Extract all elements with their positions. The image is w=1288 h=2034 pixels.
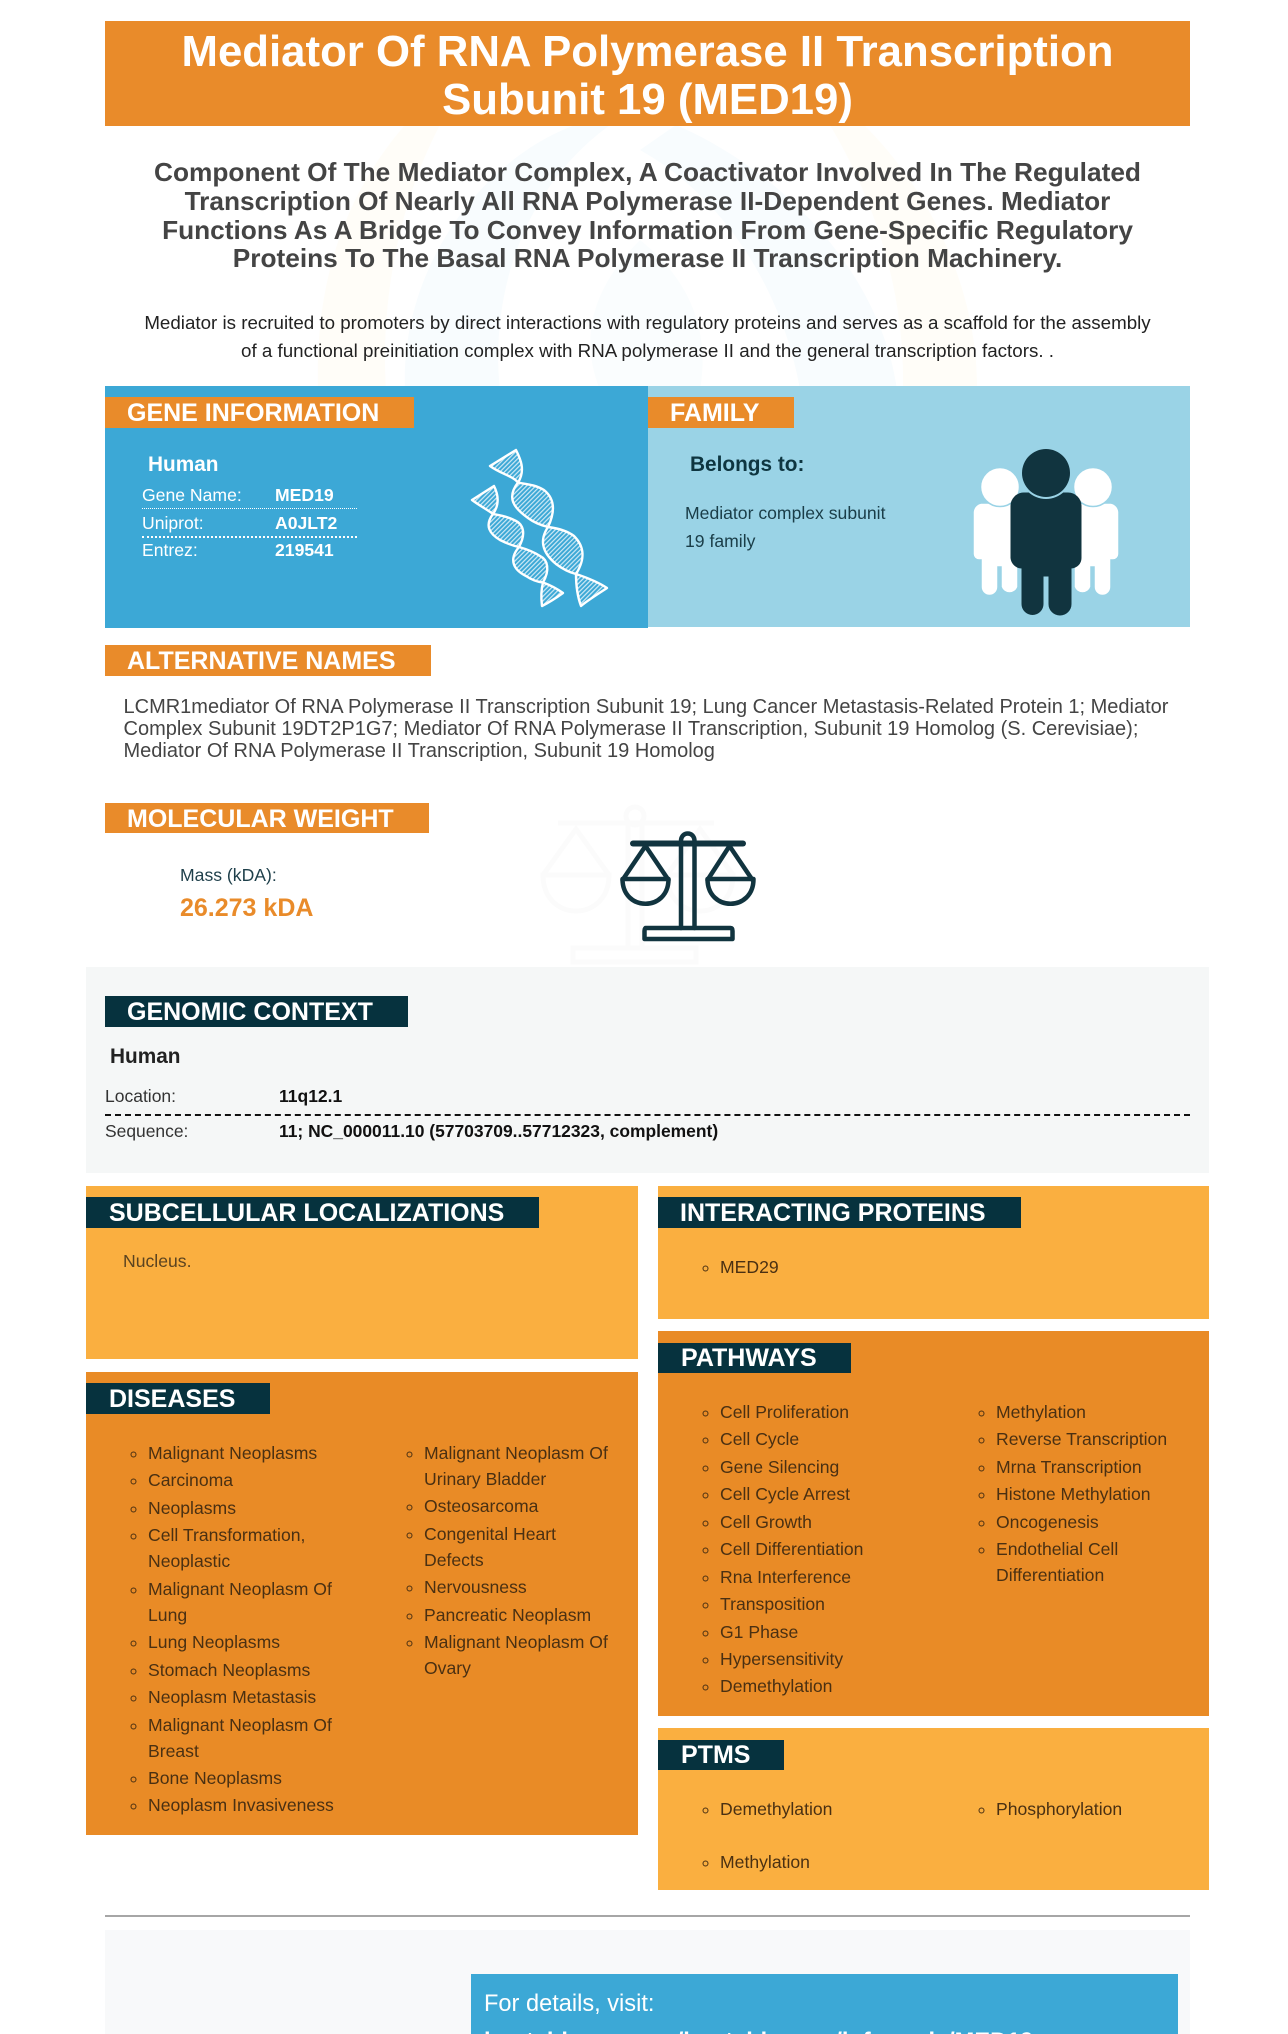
belongs to label: Belongs to:	[690, 453, 804, 476]
panel: footer	[105, 1930, 1190, 2034]
panel: interacting proteins	[658, 1186, 1209, 1319]
disease list column 1: Stomach Neoplasms	[148, 1660, 310, 1680]
pathway list column 1: Cell Proliferation	[720, 1402, 849, 1422]
details text: For details, visit:	[484, 1991, 654, 2017]
family name	[685, 503, 886, 551]
disease list column 1: Breast	[148, 1740, 199, 1760]
disease list column 1: Neoplasms	[148, 1498, 236, 1518]
footer divider	[105, 1915, 1190, 1917]
localization text: Nucleus.	[123, 1251, 191, 1271]
pathway list column 2: Histone Methylation	[996, 1484, 1151, 1504]
description: of a functional preinitiation complex with RNA polymerase II and the general transcription factors. .	[241, 340, 1054, 361]
pathway list column 1	[702, 1402, 863, 1696]
disease list column 2: Malignant Neoplasm Of	[424, 1632, 608, 1652]
icon: dna helix	[470, 448, 608, 608]
alternative names text: Mediator Of RNA Polymerase II Transcription, Subunit 19 Homolog	[124, 740, 715, 762]
pathway list column 2: Oncogenesis	[996, 1512, 1099, 1532]
location row	[105, 1085, 1190, 1116]
heading: pathways: PATHWAYS	[681, 1344, 817, 1372]
alternative names text: Complex Subunit 19DT2P1G7; Mediator Of RNA Polymerase II Transcription, Subunit 19 Homolog (S. Cerevisiae);	[124, 718, 1138, 740]
alternative names text	[124, 696, 1168, 762]
heading: family	[648, 397, 794, 428]
disease list column 1: Malignant Neoplasm Of	[148, 1714, 332, 1734]
icon: balance scale	[620, 831, 756, 942]
panel: ptms	[658, 1728, 1209, 1890]
ptm list column 1: Demethylation	[720, 1799, 832, 1819]
pathway list column 2	[978, 1402, 1167, 1585]
family name: Mediator complex subunit	[685, 503, 885, 523]
pathway list column 1: Cell Cycle	[720, 1429, 799, 1449]
gene name row: MED19	[275, 485, 334, 505]
pathway list column 2: Differentiation	[996, 1565, 1104, 1585]
title banner: Mediator Of RNA Polymerase II Transcription	[182, 27, 1113, 76]
disease list column 1: Neoplastic	[148, 1551, 230, 1571]
details text	[484, 1991, 1033, 2034]
heading: alternative names: ALTERNATIVE NAMES	[127, 647, 396, 675]
species label: Human	[148, 453, 218, 476]
disease list column 2: Ovary	[424, 1658, 471, 1678]
heading: interacting proteins: INTERACTING PROTEINS	[680, 1199, 986, 1227]
icon: ghost scale	[535, 800, 745, 967]
entrez row: Entrez:	[142, 540, 198, 560]
description: Mediator is recruited to promoters by direct interactions with regulatory proteins and serves as a scaffold for the assembly	[144, 312, 1151, 333]
heading: genomic context: GENOMIC CONTEXT	[127, 998, 373, 1026]
disease list column 2: Defects	[424, 1550, 484, 1570]
location row: 11q12.1	[279, 1086, 342, 1106]
pathway list column 1: Gene Silencing	[720, 1457, 839, 1477]
disease list column 1: Neoplasm Metastasis	[148, 1687, 316, 1707]
disease list column 1	[130, 1443, 334, 1815]
pathway list column 1: Transposition	[720, 1594, 825, 1614]
disease list column 1: Lung	[148, 1605, 187, 1625]
background watermark	[0, 0, 1288, 1000]
species label: Human	[110, 1045, 180, 1068]
panel: genomic context	[86, 967, 1209, 1173]
panel: subcellular localizations	[86, 1186, 638, 1359]
pathway list column 1: Rna Interference	[720, 1567, 851, 1587]
pathway list column 2: Mrna Transcription	[996, 1457, 1142, 1477]
uniprot row: Uniprot:	[142, 513, 204, 533]
heading: ptms: PTMS	[681, 1741, 750, 1769]
disease list column 1: Malignant Neoplasms	[148, 1443, 317, 1463]
entrez row	[142, 540, 334, 560]
disease list column 1: Malignant Neoplasm Of	[148, 1579, 332, 1599]
pathway list column 2: Reverse Transcription	[996, 1429, 1167, 1449]
panel: family	[648, 386, 1190, 627]
description	[144, 312, 1151, 361]
pathway list column 2: Methylation	[996, 1402, 1086, 1422]
panel: alternative names	[105, 645, 1168, 762]
disease list column 1: Carcinoma	[148, 1470, 233, 1490]
heading: subcellular localizations: SUBCELLULAR LOCALIZATIONS	[109, 1199, 504, 1227]
pathway list column 1: Demethylation	[720, 1676, 832, 1696]
subtitle: Transcription Of Nearly All RNA Polymerase II-Dependent Genes. Mediator	[185, 186, 1110, 216]
disease list column 1: Lung Neoplasms	[148, 1632, 280, 1652]
subtitle: Component Of The Mediator Complex, A Coactivator Involved In The Regulated	[154, 157, 1141, 187]
title banner	[105, 21, 1190, 126]
sequence row: 11; NC_000011.10 (57703709..57712323, complement)	[279, 1121, 718, 1141]
mass value: 26.273 kDA	[180, 894, 313, 922]
panel: molecular weight	[105, 803, 429, 922]
heading: diseases	[86, 1383, 270, 1414]
subtitle: Proteins To The Basal RNA Polymerase II Transcription Machinery.	[233, 243, 1062, 273]
disease list column 1: Cell Transformation,	[148, 1525, 305, 1545]
heading: diseases: DISEASES	[109, 1385, 235, 1413]
alternative names text: LCMR1mediator Of RNA Polymerase II Transcription Subunit 19; Lung Cancer Metastasis-Related Protein 1; Mediator	[124, 696, 1168, 718]
disease list column 1: Neoplasm Invasiveness	[148, 1795, 334, 1815]
icon: people group	[974, 449, 1118, 616]
pathway list column 1: G1 Phase	[720, 1622, 798, 1642]
disease list column 2: Congenital Heart	[424, 1524, 556, 1544]
disease list column 2: Malignant Neoplasm Of	[424, 1443, 608, 1463]
location row: Location:	[105, 1086, 176, 1106]
mass label: Mass (kDA):	[180, 865, 277, 885]
disease list column 1: Bone Neoplasms	[148, 1768, 282, 1788]
panel: gene information	[105, 386, 648, 628]
heading: gene information: GENE INFORMATION	[127, 399, 379, 427]
heading: family: FAMILY	[670, 399, 759, 427]
pathway list column 1: Cell Differentiation	[720, 1539, 863, 1559]
sequence row: Sequence:	[105, 1121, 188, 1141]
ptm list column 2: Phosphorylation	[996, 1799, 1122, 1819]
subtitle: Functions As A Bridge To Convey Information From Gene-Specific Regulatory	[162, 215, 1133, 245]
gene name row: Gene Name:	[142, 485, 242, 505]
pathway list column 1: Cell Cycle Arrest	[720, 1484, 850, 1504]
uniprot row: A0JLT2	[275, 513, 337, 533]
family name: 19 family	[685, 531, 755, 551]
ptm list column 1	[702, 1799, 832, 1872]
uniprot row	[142, 512, 357, 538]
disease list column 2: Nervousness	[424, 1577, 527, 1597]
heading: ptms	[658, 1740, 784, 1770]
disease list column 2: Pancreatic Neoplasm	[424, 1605, 591, 1625]
title banner: Subunit 19 (MED19)	[442, 75, 853, 124]
disease list column 2: Urinary Bladder	[424, 1469, 546, 1489]
gene name row	[142, 484, 357, 509]
subtitle	[154, 157, 1141, 273]
pathway list column 1: Hypersensitivity	[720, 1649, 843, 1669]
protein list: MED29	[720, 1257, 779, 1277]
panel: diseases	[86, 1372, 638, 1835]
pathway list column 1: Cell Growth	[720, 1512, 812, 1532]
pathway list column 2: Endothelial Cell	[996, 1539, 1118, 1559]
panel: pathways	[658, 1331, 1209, 1716]
callout: details link	[471, 1974, 1178, 2034]
ptm list column 1: Methylation	[720, 1852, 810, 1872]
entrez row: 219541	[275, 540, 334, 560]
heading: molecular weight: MOLECULAR WEIGHT	[127, 805, 394, 833]
disease list column 2	[406, 1443, 608, 1678]
heading: pathways	[658, 1343, 851, 1373]
disease list column 2: Osteosarcoma	[424, 1496, 538, 1516]
